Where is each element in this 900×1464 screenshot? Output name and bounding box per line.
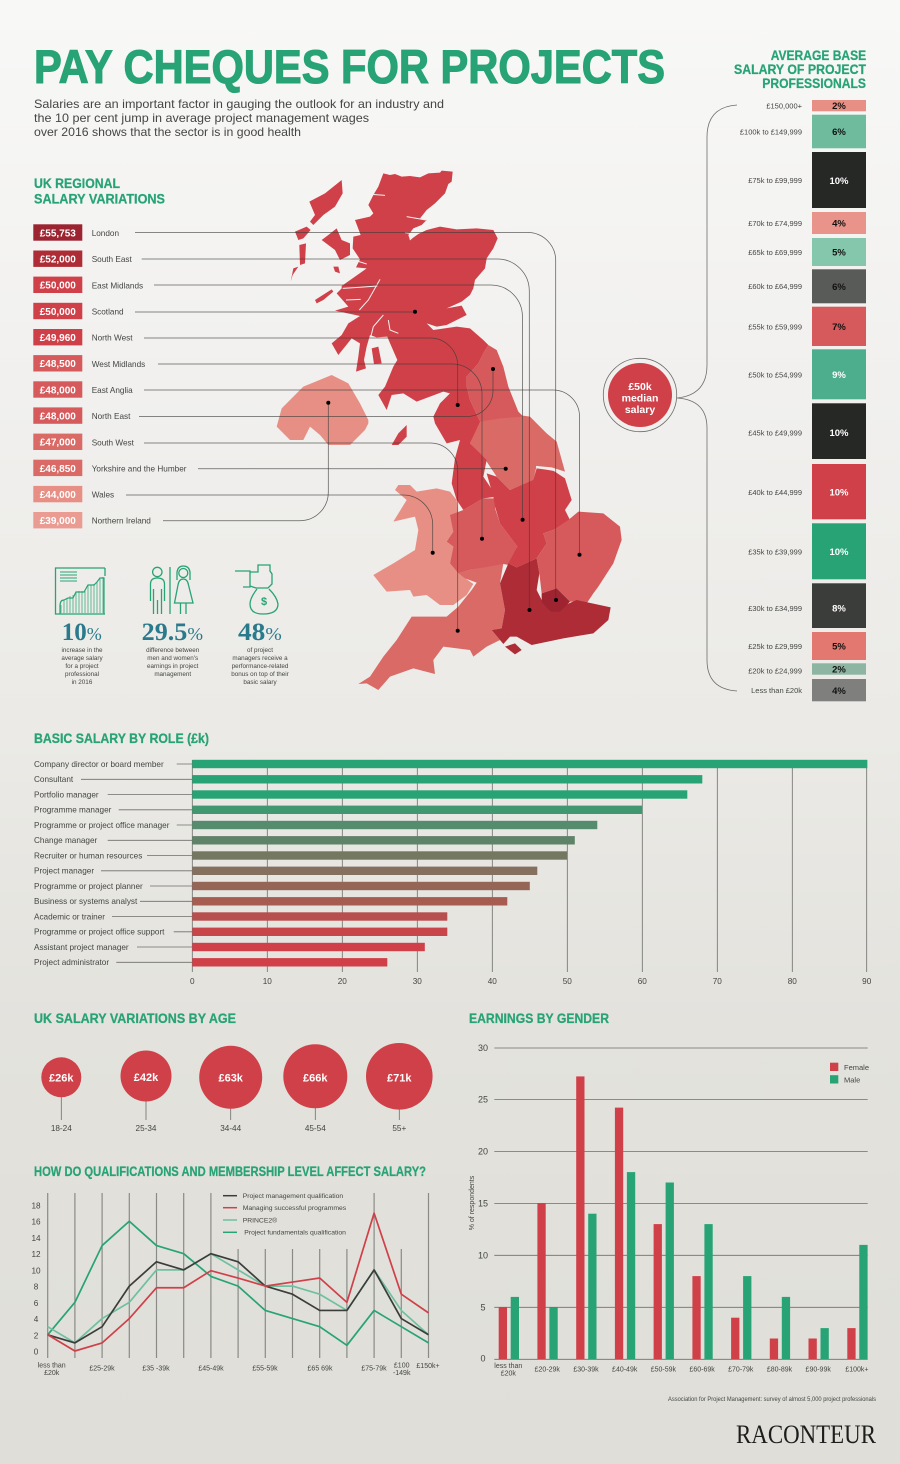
row: West Midlands: £48,500 [40, 359, 76, 370]
intro text [34, 97, 444, 139]
bubble: 45-54: £66k [303, 1072, 328, 1084]
line chart: qualifications: £35 -39k [142, 1366, 170, 1372]
row: London [33, 224, 119, 241]
band: 70k: 4% [832, 218, 846, 230]
bar chart: salary by role: Programme manager [34, 806, 112, 814]
row: London: London [92, 229, 119, 238]
band: 65k: £65k to £69,999 [748, 248, 802, 257]
band: 50k [748, 349, 866, 399]
legend: qualifications: PRINCE2® [243, 1216, 277, 1224]
line chart: qualifications: -149k [393, 1370, 411, 1377]
bar chart: earnings by gender: 20 [478, 1146, 488, 1156]
heading: basic salary by role: BASIC SALARY BY ROLE (£k) [34, 731, 209, 746]
band: 40k: £40k to £44,999 [748, 488, 802, 497]
band: 45k: 10% [829, 428, 849, 439]
legend: qualifications [223, 1193, 347, 1237]
bar chart: salary by role: 10 [263, 977, 272, 986]
row: South West: £47,000 [40, 438, 76, 449]
band: 25k: £25k to £29,999 [748, 642, 802, 651]
title: PAY CHEQUES FOR PROJECTS [34, 40, 665, 93]
row: East Midlands: East Midlands [92, 281, 143, 290]
line chart: qualifications: 2 [34, 1331, 39, 1340]
band: 75k: £75k to £99,999 [748, 176, 802, 185]
band: under 20k [751, 679, 866, 701]
bar chart: salary by role: 70 [713, 977, 722, 986]
bar chart: earnings by gender: £80-89k [767, 1366, 793, 1374]
line chart: qualifications: 6 [34, 1299, 39, 1308]
callout: median salary [603, 358, 677, 432]
line chart: qualifications: £100 [394, 1362, 410, 1370]
band: 30k: 8% [832, 604, 846, 614]
stat: 10 per cent increase: 10% [62, 619, 102, 646]
row: Wales: £44,000 [40, 490, 76, 501]
row: North West: North West [92, 334, 133, 343]
line chart: qualifications: £55-59k [252, 1366, 278, 1372]
map leader lines and dots [126, 232, 582, 633]
line chart: qualifications: £25-29k [89, 1366, 115, 1372]
band: 35k [748, 523, 866, 579]
bubble: 55+ [366, 1043, 433, 1133]
band: 30k: £30k to £34,999 [748, 604, 802, 613]
stat: 48 per cent bonus: managers receive a [232, 655, 288, 662]
stat: 48 per cent bonus: 48% [238, 619, 282, 646]
stat: 48 per cent bonus: performance-related [232, 663, 289, 670]
row: North East [33, 407, 131, 424]
map region: Northern Ireland [277, 375, 368, 445]
source note: Association for Project Management: survey of almost 5,000 project professionals [668, 1397, 876, 1403]
map: Scottish islands [291, 180, 382, 364]
row: Northern Ireland [33, 512, 151, 528]
row: Yorkshire and the Humber [33, 460, 187, 476]
bubble: 25-34: £42k [134, 1072, 159, 1084]
band: 75k: 10% [829, 176, 849, 187]
row: West Midlands [33, 355, 145, 372]
band: 55k [748, 307, 866, 346]
row: Yorkshire and the Humber: £46,850 [40, 464, 76, 475]
band: 70k [748, 212, 866, 234]
row: North West: £49,960 [40, 333, 76, 344]
line chart: qualifications: £20k [44, 1370, 60, 1377]
bubble chart: salary by age [41, 1043, 433, 1133]
bar chart: earnings by gender: 25 [478, 1094, 488, 1104]
band: 45k: £45k to £49,999 [748, 428, 802, 438]
heading: UK regional salary variations [34, 176, 165, 206]
bar chart: earnings by gender: 30 [478, 1043, 488, 1053]
line chart: qualifications: £75-79k [361, 1366, 387, 1372]
band: 60k: £60k to £64,999 [748, 282, 802, 291]
band: 40k [748, 464, 866, 519]
bar chart: earnings by gender: £50-59k [651, 1366, 677, 1374]
line chart: qualifications: 14 [31, 1234, 41, 1243]
line chart: qualifications: 18 [31, 1202, 41, 1210]
stat: 29.5 per cent gender gap: men and women's [147, 655, 198, 662]
row: South West [33, 434, 135, 450]
row: South East: £52,000 [40, 255, 76, 266]
bar chart: salary by role: Assistant project manager [34, 943, 129, 952]
line chart: qualifications: 12 [31, 1250, 41, 1259]
band: 50k: £50k to £54,999 [748, 370, 802, 380]
bubble: 25-34 [120, 1050, 172, 1133]
bar chart: earnings by gender: £40-49k [612, 1366, 638, 1374]
heading: earnings by gender: EARNINGS BY GENDER [469, 1011, 609, 1026]
bubble: 34-44: 34-44 [220, 1124, 242, 1133]
line chart: qualifications: £65 69k [308, 1366, 333, 1372]
band: 20k: 2% [832, 664, 846, 676]
bar chart: earnings by gender: £60-69k [689, 1366, 715, 1374]
band: under 20k: Less than £20k [751, 686, 802, 695]
bar chart: earnings by gender: £70-79k [728, 1366, 754, 1374]
bar chart: salary by role: Programme or project office manager [34, 821, 170, 830]
map region: Isle of Wight [505, 643, 522, 654]
line chart: qualifications [31, 1193, 440, 1377]
bar chart: salary by role: Programme or project planner [34, 882, 143, 891]
bar chart: earnings by gender: £20-29k [535, 1366, 560, 1374]
map region: South East [492, 558, 611, 645]
row: East Anglia [33, 381, 133, 398]
map region: North East [467, 345, 523, 422]
row: Wales [33, 486, 114, 502]
legend: qualifications: Project fundamentals qualification [244, 1230, 346, 1237]
bar chart: earnings by gender: £90-99k [806, 1366, 831, 1374]
intro text: over 2016 shows that the sector is in good health [34, 125, 301, 139]
bar chart: salary by role: 80 [788, 977, 797, 986]
legend: qualifications: Project management qualification [243, 1193, 343, 1200]
row: North East: £48,000 [40, 412, 76, 422]
bubble: 34-44: £63k [218, 1072, 244, 1084]
bar chart: salary by role: Project manager [34, 866, 94, 876]
row: North East: North East [92, 412, 131, 421]
intro text: the 10 per cent jump in average project management wages [34, 111, 369, 125]
icon: rising chart [56, 568, 105, 614]
band: 75k [748, 152, 866, 208]
bar chart: salary by role [34, 760, 872, 986]
line chart: qualifications: £150k+ [416, 1363, 440, 1370]
stat: 29.5 per cent gender gap: 29.5% [142, 619, 203, 646]
row: South East [33, 250, 132, 267]
heading: average base salary [734, 48, 867, 91]
bar chart: salary by role: 20 [338, 977, 347, 986]
row: Wales: Wales [92, 491, 114, 500]
intro text: Salaries are an important factor in gauging the outlook for an industry and [34, 97, 444, 111]
row: East Midlands: £50,000 [40, 281, 76, 292]
legend: gender [830, 1063, 869, 1084]
bubble: 18-24 [41, 1057, 81, 1133]
band: 35k: 10% [829, 547, 849, 558]
bar chart: salary by role: 60 [638, 977, 647, 986]
map region: Yorkshire and the Humber [470, 413, 565, 490]
band: 25k [748, 632, 866, 660]
line chart: qualifications: 8 [34, 1283, 39, 1292]
band: 60k: 6% [832, 282, 846, 293]
bar chart: earnings by gender: less than [494, 1363, 522, 1370]
row: Scotland: £50,000 [40, 307, 76, 318]
icon: hand holding money bag: $ [261, 596, 267, 608]
band: 65k [748, 238, 866, 266]
legend: qualifications: Managing successful programmes [243, 1205, 347, 1212]
map region: South West [358, 563, 505, 690]
bar chart: salary by role: 40 [488, 977, 497, 986]
bar chart: earnings by gender: £30-39k [573, 1366, 599, 1374]
bar chart: earnings by gender: 5 [480, 1302, 486, 1312]
band: 50k: 9% [832, 370, 846, 381]
stat: 10 per cent increase: in 2016 [72, 679, 93, 686]
bar chart: earnings by gender [469, 1043, 869, 1378]
bubble: 18-24: 18-24 [51, 1124, 72, 1133]
bar chart: salary by role: Business or systems analyst [34, 897, 138, 906]
row: Northern Ireland: Northern Ireland [92, 517, 151, 526]
band: 150k plus [766, 100, 866, 112]
bar chart: salary by role: 0 [190, 977, 195, 986]
stat: 48 per cent bonus: basic salary [243, 679, 277, 686]
bar chart: salary by role: 90 [862, 977, 872, 986]
stat: 10 per cent increase: for a project [65, 663, 99, 670]
bar chart: salary by role: Academic or trainer [34, 912, 105, 921]
band: 35k: £35k to £39,999 [748, 548, 802, 556]
row: Yorkshire and the Humber: Yorkshire and the Humber [92, 464, 187, 473]
stat: 48 per cent bonus [231, 565, 289, 686]
heading: average base salary: AVERAGE BASE [771, 48, 866, 63]
band: 100k: 6% [832, 127, 846, 138]
stat: 29.5 per cent gender gap: earnings in project [147, 663, 199, 670]
callout: median salary: salary [625, 404, 655, 416]
legend: gender: Male [844, 1076, 860, 1084]
row: East Midlands [33, 277, 143, 293]
heading: UK regional salary variations: UK REGIONAL [34, 176, 120, 191]
band: 150k plus: £150,000+ [766, 102, 803, 110]
bar chart: earnings by gender: 15 [478, 1198, 488, 1208]
band: 45k [748, 403, 866, 459]
map region: London [542, 588, 570, 612]
median bracket [677, 105, 737, 691]
icon: man and woman [150, 566, 193, 614]
stat: 48 per cent bonus: of project [247, 647, 273, 654]
logo: Raconteur: RACONTEUR [736, 1420, 877, 1449]
line chart: qualifications: 16 [31, 1218, 41, 1227]
row: London: £55,753 [40, 228, 76, 239]
heading: UK regional salary variations: SALARY VARIATIONS [34, 192, 165, 206]
band: 100k [740, 115, 866, 148]
row: West Midlands: West Midlands [92, 360, 145, 369]
bar chart: salary by role: 30 [413, 977, 422, 986]
row: Northern Ireland: £39,000 [40, 516, 76, 527]
UK map [277, 171, 622, 690]
bubble: 55+: 55+ [392, 1124, 406, 1133]
band: 60k [748, 269, 866, 303]
band: 70k: £70k to £74,999 [748, 219, 802, 228]
band: 25k: 5% [832, 642, 846, 652]
line chart: qualifications: £45-49k [198, 1366, 224, 1372]
row: South West: South West [92, 438, 135, 447]
heading: qualifications: HOW DO QUALIFICATIONS AND MEMBERSHIP LEVEL AFFECT SALARY? [34, 1164, 426, 1179]
row: Scotland [33, 303, 124, 319]
bar chart: salary by role: Change manager [34, 836, 98, 845]
row: East Anglia: East Anglia [92, 386, 133, 395]
bubble: 25-34: 25-34 [136, 1124, 157, 1133]
bar chart: earnings by gender: 10 [478, 1250, 488, 1260]
stat: 29.5 per cent gender gap: management [154, 671, 191, 678]
line chart: qualifications: 4 [34, 1315, 39, 1324]
line chart: qualifications: 10 [31, 1266, 41, 1275]
band: 100k: £100k to £149,999 [740, 128, 802, 136]
row: Scotland: Scotland [92, 308, 124, 316]
stat: 10 per cent increase: average salary [61, 655, 103, 662]
stat: 10 per cent increase: professional [65, 671, 99, 678]
bar chart: salary by role: Company director or board member [34, 760, 164, 769]
bubble: 34-44 [199, 1046, 262, 1133]
band: 65k: 5% [832, 248, 846, 258]
stat: 10 per cent increase [56, 568, 105, 686]
bar chart: salary by role: Recruiter or human resources [34, 851, 142, 860]
band: 55k: 7% [832, 322, 846, 333]
bubble: 18-24: £26k [49, 1072, 74, 1084]
callout: median salary: £50k [628, 381, 652, 393]
line chart: qualifications: 0 [34, 1348, 39, 1356]
band: 55k: £55k to £59,999 [748, 322, 802, 332]
map region: Isle of Man [392, 425, 407, 445]
bar chart: salary by role: Programme or project office support [34, 928, 165, 936]
heading: salary by age: UK SALARY VARIATIONS BY AGE [34, 1011, 236, 1026]
row: North West [33, 329, 133, 345]
legend: gender: Female [844, 1063, 869, 1072]
band: 20k [748, 663, 866, 676]
stat: 29.5 per cent gender gap: difference between [146, 647, 200, 654]
band: under 20k: 4% [832, 686, 846, 697]
bubble: 45-54 [283, 1044, 347, 1133]
row: South East: South East [92, 255, 132, 264]
bar chart: earnings by gender: £20k [501, 1370, 516, 1378]
bar chart: salary by role: Project administrator [34, 958, 109, 967]
map region: West Midlands [447, 498, 517, 573]
map region: East Midlands [487, 468, 572, 567]
heading: average base salary: PROFESSIONALS [762, 76, 866, 91]
salary rows [33, 224, 187, 528]
map region: East of England [537, 512, 622, 603]
row: East Anglia: £48,000 [40, 385, 76, 396]
map region: Scotland and North West [332, 171, 498, 510]
bar chart: salary by role: 50 [563, 977, 572, 986]
heading: average base salary: SALARY OF PROJECT [734, 62, 867, 77]
map region: Wales [373, 485, 473, 605]
band: 40k: 10% [829, 488, 849, 498]
stat: 48 per cent bonus: bonus on top of their [231, 671, 289, 678]
bubble: 45-54: 45-54 [305, 1124, 326, 1133]
bubble: 55+: £71k [387, 1072, 412, 1084]
bar chart: earnings by gender: £100k+ [845, 1366, 868, 1374]
stat: 29.5 per cent gender gap [142, 566, 203, 678]
stat: 10 per cent increase: increase in the [62, 647, 103, 654]
bar chart: earnings by gender: % of respondents [469, 1175, 476, 1230]
bar chart: salary by role: Consultant [34, 775, 74, 784]
salary band chart [740, 100, 866, 701]
band: 20k: £20k to £24,999 [748, 667, 802, 676]
bar chart: earnings by gender: 0 [480, 1354, 486, 1364]
bar chart: salary by role: Portfolio manager [34, 790, 99, 799]
band: 150k plus: 2% [832, 101, 846, 112]
line chart: qualifications: less than [38, 1362, 66, 1370]
band: 30k [748, 583, 866, 628]
callout: median salary: median [622, 392, 658, 404]
